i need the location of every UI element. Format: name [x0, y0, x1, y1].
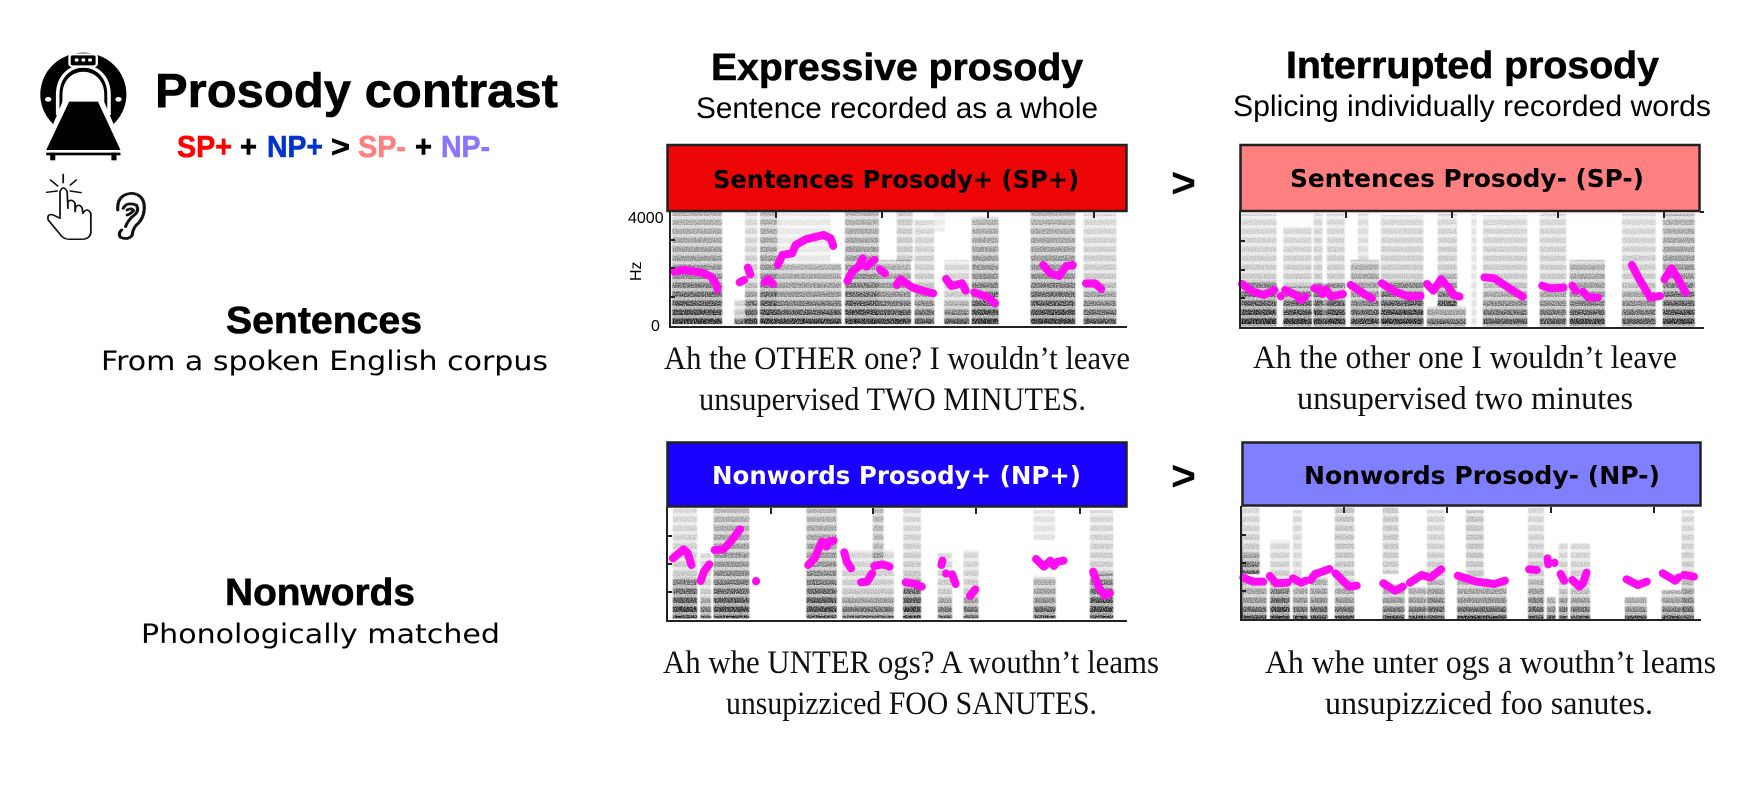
axis labels: 4000	[628, 210, 664, 227]
contrast formula: +	[415, 129, 432, 164]
panel: nonwords prosody plus spectrogram	[667, 507, 1127, 621]
panel: sentences prosody minus spectrogram	[1240, 211, 1704, 328]
condition box: NP-: Nonwords Prosody- (NP-)	[1304, 461, 1660, 490]
contrast formula: >	[331, 129, 350, 164]
panel: nonwords prosody minus spectrogram	[1241, 506, 1701, 620]
transcript: SP-	[1253, 340, 1677, 417]
condition box: NP+	[668, 442, 1126, 506]
column heading: expressive prosody	[696, 47, 1098, 125]
row label: nonwords: Nonwords	[225, 572, 415, 614]
row label: sentences	[101, 300, 548, 377]
pitch contour: SP+	[674, 235, 1101, 303]
transcript: SP+: Ah the OTHER one? I wouldn’t leave	[664, 341, 1130, 377]
row label: sentences: From a spoken English corpus	[101, 346, 548, 377]
transcript: NP+: unsupizziced FOO SANUTES.	[726, 686, 1097, 722]
panel: sentences prosody plus spectrogram	[628, 210, 1127, 335]
transcript: NP-	[1265, 645, 1716, 722]
transcript: NP+	[663, 645, 1159, 722]
transcript: SP-: unsupervised two minutes	[1297, 381, 1633, 417]
contrast formula	[177, 129, 490, 164]
transcript: NP-: unsupizziced foo sanutes.	[1325, 686, 1653, 722]
column heading: interrupted prosody	[1233, 45, 1711, 123]
contrast formula: SP+	[177, 129, 232, 164]
greater-than sign: sentences: >	[1171, 159, 1196, 206]
column heading: expressive prosody: Expressive prosody	[711, 47, 1083, 89]
transcript: SP+: unsupervised TWO MINUTES.	[699, 382, 1086, 418]
condition box: SP-	[1240, 145, 1700, 211]
contrast formula: NP-	[441, 129, 490, 164]
column heading: interrupted prosody: Splicing individually recorded words	[1233, 90, 1711, 123]
contrast formula: +	[240, 129, 257, 164]
row label: sentences: Sentences	[226, 300, 422, 342]
pitch contour: SP-	[1242, 265, 1686, 300]
condition box: NP-	[1242, 442, 1700, 506]
pitch contour: NP+	[673, 529, 1110, 596]
row label: nonwords: Phonologically matched	[141, 619, 500, 650]
condition box: SP-: Sentences Prosody- (SP-)	[1290, 164, 1644, 193]
axis labels: Hz	[628, 261, 645, 281]
condition box: SP+	[668, 145, 1126, 211]
transcript: SP-: Ah the other one I wouldn’t leave	[1253, 340, 1677, 376]
column heading: expressive prosody: Sentence recorded as a whole	[696, 92, 1098, 125]
contrast formula: SP-	[358, 129, 406, 164]
title: Prosody contrast	[155, 65, 558, 118]
transcript: NP+: Ah whe UNTER ogs? A wouthn’t leams	[663, 645, 1159, 681]
column heading: interrupted prosody: Interrupted prosody	[1286, 45, 1659, 87]
row label: nonwords	[141, 572, 500, 650]
condition box: SP+: Sentences Prosody+ (SP+)	[713, 165, 1079, 194]
condition box: NP+: Nonwords Prosody+ (NP+)	[712, 461, 1081, 490]
contrast formula: NP+	[267, 129, 323, 164]
transcript: NP-: Ah whe unter ogs a wouthn’t leams	[1265, 645, 1716, 681]
icon: MRI scanner	[40, 53, 127, 160]
axis labels	[628, 210, 664, 335]
greater-than sign: nonwords: >	[1171, 452, 1196, 499]
icon: pointing hand	[47, 174, 91, 239]
transcript: SP+	[664, 341, 1130, 418]
axis labels: 0	[651, 318, 660, 335]
icon: ear	[118, 193, 144, 239]
pitch contour: NP-	[1243, 558, 1694, 591]
